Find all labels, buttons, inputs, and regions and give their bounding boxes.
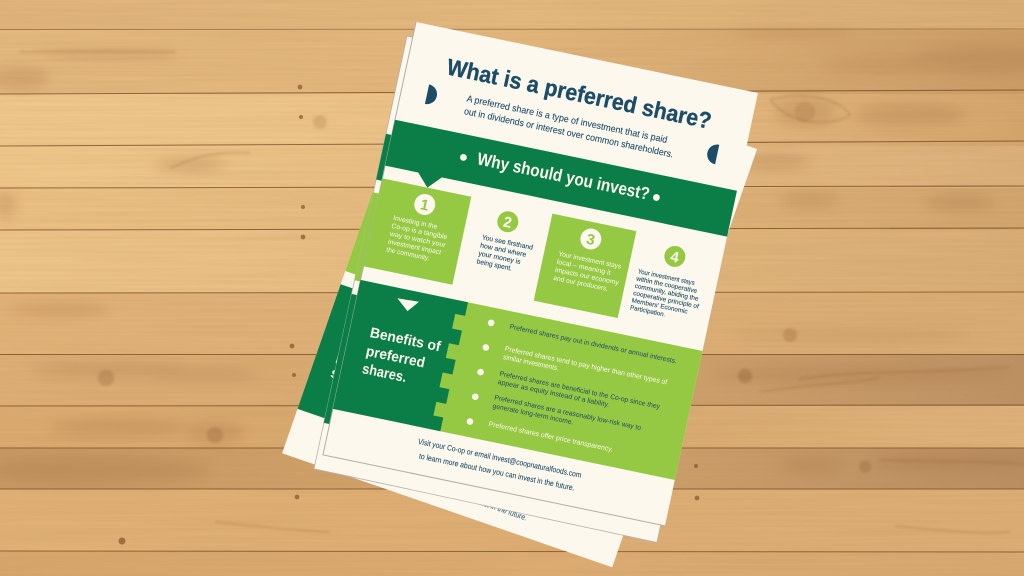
reason 3 text: and our producers. [553,275,609,293]
subtitle: out in dividends or interest over common shareholders. [463,106,674,159]
benefits heading: shares. [361,361,408,386]
reason 3 card [534,214,636,318]
banner dot right [652,193,660,202]
title: What is a preferred share? [445,54,714,134]
reason 2 text: how and where [479,242,527,259]
panel: benefits list background [431,300,703,480]
bottom sheet footer: to learn more about how you can invest in the future. [375,462,528,522]
reason 3 text: local – meaning it [556,259,611,277]
banner heading: Why should you invest? [475,148,652,204]
benefit 3: appear as equity instead of a liability. [497,379,610,409]
benefit 3 [475,366,661,419]
reason 4 [628,239,711,325]
benefit 2: Preferred shares tend to pay higher than other types of [504,346,668,386]
badge 1: 1 [419,196,430,215]
reason 2 text: your money is [478,250,522,266]
benefit 5: Preferred shares offer price transparency. [488,421,614,454]
reason 4 text: Your investment stays [637,268,695,287]
reason 1 text: way to watch your [388,231,447,249]
flyer sheet: middle [314,36,750,543]
badge 2: 2 [502,214,513,232]
reason 2 text: being spent. [476,258,513,273]
reason 4 text: Members' Economic [631,297,689,316]
paper [323,22,758,526]
reason 4 text: community, abiding the [634,283,699,303]
icon: left half circle [425,84,439,106]
reason 3 text: Your investment stays [558,251,622,271]
reason 1 text: Co-op is a tangible [391,223,448,241]
reason 1 text: the community. [386,247,430,262]
bottom sheet heading: preferred [334,348,400,384]
benefit 4: generate long-term income. [492,403,574,427]
paper edge shadow [323,22,758,526]
reason 4 text: Participation. [629,304,666,319]
benefit 2 [481,341,668,395]
benefits heading: Benefits of [368,325,442,355]
footer call to action: Visit your Co-op or email invest@coopnaturalfoods.com [417,437,582,480]
footer call to action: to learn more about how you can invest in the future. [418,452,575,493]
benefits heading: preferred [364,344,426,372]
bottom sheet heading: shares. [328,365,382,397]
badge 3: 3 [585,231,596,249]
badge 4: 4 [669,248,681,267]
flyer sheet: top [323,22,758,526]
benefit 4 [470,390,642,440]
flyer sheet: bottom [282,35,757,567]
banner: why should you invest [382,120,737,249]
reason 4 text: cooperative principle of [632,290,700,310]
reason 2 [476,207,540,276]
icon: right half circle [705,143,719,164]
reason 3 text: impacts our economy [554,267,620,287]
benefit 3: Preferred shares are beneficial to the Co-op since they [499,371,661,411]
panel: benefits heading with notched edge [333,280,468,431]
benefit 2: similar investments. [502,354,560,373]
banner pointer [415,171,443,190]
reason 4 text: within the cooperative [635,275,698,295]
reason 2 text: You see firsthand [481,234,534,252]
reason 1 text: Investing in the [392,215,438,231]
bottom sheet heading: Benefits of [341,330,417,370]
subtitle: A preferred share is a type of investment that is paid [466,94,668,145]
icon: down triangle [395,297,419,313]
reason 1 card [364,178,471,285]
reason 1 text: investment impact [387,239,442,256]
banner dot left [459,153,467,161]
benefit 4: Preferred shares are a reasonably low-risk way to [494,395,642,432]
benefit 1: Preferred shares pay out in dividends or annual interests. [509,324,677,365]
